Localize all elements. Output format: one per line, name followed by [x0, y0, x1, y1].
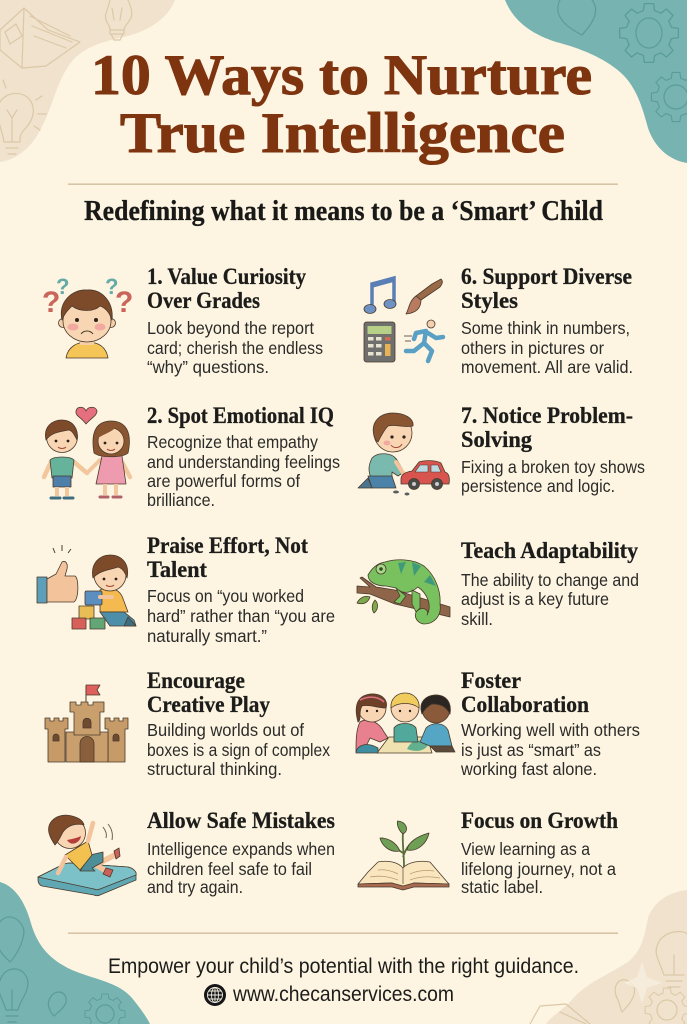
description: Focus on “you worked [147, 586, 304, 606]
item 6: diverse styles [364, 264, 633, 377]
description: Look beyond the report [147, 318, 314, 338]
description [460, 720, 640, 779]
description: static label. [461, 877, 543, 897]
heading [461, 668, 589, 717]
description [147, 318, 323, 377]
heading [147, 533, 308, 582]
icon: sand castle with flag [45, 685, 128, 762]
heading [461, 403, 633, 452]
heading: Solving [461, 427, 532, 452]
heading: Styles [461, 288, 518, 313]
description: structural thinking. [147, 759, 282, 779]
description [461, 839, 616, 897]
decorative corner: bottom left teal blob with icons [0, 882, 150, 1024]
heading [147, 264, 306, 313]
description [147, 839, 335, 897]
item 10: growth [358, 808, 618, 897]
icon: question marks [42, 274, 133, 319]
heading: 2. Spot Emotional IQ [147, 403, 334, 428]
item 8: adaptability [357, 538, 639, 629]
decorative corner: bottom right beige blob with icons [530, 890, 687, 1024]
decorative corner: top right teal blob with heart and gears [505, 0, 687, 163]
description: is just as “smart” as [461, 740, 601, 760]
description: and try again. [147, 877, 243, 897]
description: The ability to change and [461, 570, 639, 590]
item 4: creative play [45, 668, 330, 779]
description: naturally smart.” [147, 626, 267, 646]
item 2: emotional IQ [44, 403, 340, 510]
subtitle: Redefining what it means to be a ‘Smart’ Child [84, 196, 603, 227]
icon: boy fixing a toy car [358, 413, 449, 496]
description: adjust is a key future [461, 589, 609, 609]
description: Recognize that empathy [147, 432, 318, 452]
heading: Focus on Growth [461, 808, 618, 833]
decorative corner: top left beige blob with book and bulbs [0, 0, 175, 162]
description: working fast alone. [460, 759, 597, 779]
description [461, 457, 645, 496]
footer tagline: Empower your child’s potential with the right guidance. [108, 955, 579, 978]
icon: laughing boy falling on a mattress [38, 815, 136, 896]
title [91, 44, 592, 165]
icon: two children holding hands under a heart [44, 407, 130, 498]
icon: confused boy with question marks [42, 274, 133, 358]
description: Some think in numbers, [461, 318, 630, 338]
icon: globe [204, 984, 226, 1006]
icon: green chameleon on a branch [357, 560, 450, 624]
item 7: problem solving [358, 403, 645, 496]
description: others in pictures or [461, 338, 604, 358]
description: Fixing a broken toy shows [461, 457, 645, 477]
icon: question marks: ? [115, 286, 133, 319]
description: hard” rather than “you are [147, 606, 335, 626]
description [147, 720, 330, 779]
icon: thumbs up and boy with blocks [37, 545, 136, 629]
item 9: collaboration [356, 668, 640, 779]
heading: 7. Notice Problem- [461, 403, 633, 428]
icon: seedling growing from an open book [358, 821, 449, 890]
item 1: value curiosity [42, 264, 323, 377]
heading: Creative Play [147, 692, 270, 717]
heading: Foster [461, 668, 521, 693]
icon: three children working on a map [356, 693, 455, 753]
heading: Over Grades [147, 288, 260, 313]
description [147, 586, 335, 646]
footer website with globe icon [204, 983, 454, 1006]
icon: music note, paintbrush, calculator and runner [364, 278, 443, 362]
description: brilliance. [147, 490, 215, 510]
description [147, 432, 340, 510]
heading: Encourage [147, 668, 245, 693]
icon: question marks: ? [105, 274, 118, 299]
description: children feel safe to fail [147, 859, 312, 879]
description: View learning as a [461, 839, 590, 859]
heading [461, 264, 632, 313]
description: persistence and logic. [461, 476, 615, 496]
heading: Collaboration [461, 692, 589, 717]
description [461, 318, 633, 377]
description: Intelligence expands when [147, 839, 335, 859]
item 5: safe mistakes [38, 808, 335, 897]
item 3: praise effort [37, 533, 335, 646]
icon: question marks: ? [56, 274, 69, 299]
heading: Praise Effort, Not [147, 533, 308, 558]
description: movement. All are valid. [461, 357, 633, 377]
heading: Allow Safe Mistakes [147, 808, 335, 833]
description [461, 570, 639, 629]
description: lifelong journey, not a [461, 859, 616, 879]
title: 10 Ways to Nurture [91, 44, 592, 107]
description: Building worlds out of [147, 720, 304, 740]
heading [147, 668, 270, 717]
title: True Intelligence [120, 102, 565, 165]
description: card; cherish the endless [147, 338, 323, 358]
description: boxes is a sign of complex [147, 740, 330, 760]
description: are powerful forms of [147, 471, 300, 491]
description: skill. [461, 609, 493, 629]
icon: question marks: ? [42, 286, 60, 319]
heading: Teach Adaptability [461, 538, 638, 563]
website address: www.checanservices.com [232, 983, 454, 1006]
heading: Talent [147, 557, 207, 582]
description: and understanding feelings [147, 452, 340, 472]
description: Working well with others [461, 720, 640, 740]
heading: 6. Support Diverse [461, 264, 632, 289]
heading: 1. Value Curiosity [147, 264, 306, 289]
description: “why” questions. [147, 357, 269, 377]
